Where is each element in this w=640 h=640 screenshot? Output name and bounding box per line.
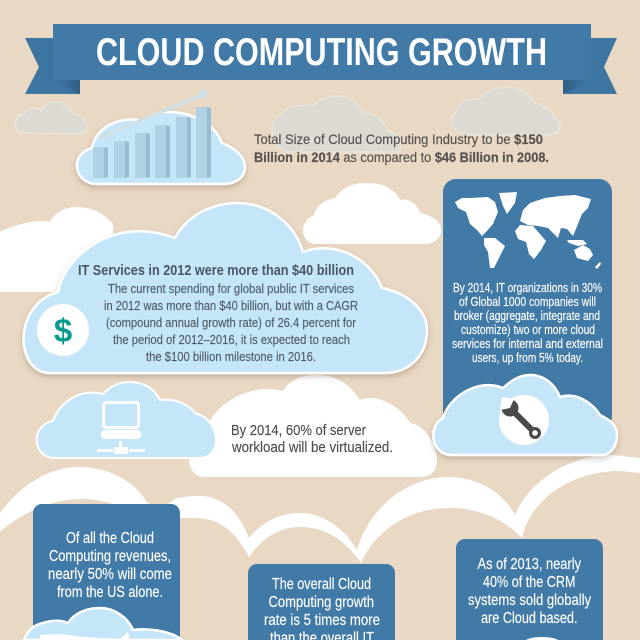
white arcs: lower cloud outline: [0, 455, 640, 640]
US map cloud: [24, 608, 182, 640]
panel text: nearly 50% will come: [48, 566, 172, 583]
icon: dollar: $: [54, 312, 72, 349]
panel text: [264, 576, 380, 640]
panel text: systems sold globally: [468, 592, 591, 609]
cloud shape: [77, 112, 245, 184]
panel text: rate is 5 times more: [264, 612, 380, 629]
background cloud: middle: [272, 96, 401, 152]
icon: dollar: [37, 304, 89, 356]
panel text: of Global 1000 companies will: [459, 295, 596, 309]
wrench cloud: [433, 375, 617, 455]
panel text: Computing revenues,: [49, 548, 171, 565]
ribbon tail left: [25, 38, 80, 94]
panel text: Of all the Cloud: [66, 530, 154, 547]
cloud top: [526, 637, 558, 640]
panel text: 40% of the CRM: [483, 574, 576, 591]
panel text: [468, 556, 591, 627]
cloud shape: [37, 382, 216, 458]
lower background cloud fill: [0, 471, 640, 640]
text: server workload: workload will be virtualized.: [231, 440, 393, 456]
text: total size of industry: Total Size of Cloud Computing Industry to be $150: [254, 131, 543, 147]
panel text: services for internal and external: [452, 337, 603, 351]
text: server workload: [231, 423, 393, 456]
icon: computer: [97, 402, 145, 454]
heading: IT Services in 2012 were more than $40 billion: [78, 263, 354, 279]
panel background: [456, 539, 603, 640]
ribbon tail right: [563, 38, 617, 94]
panel: US revenues: [24, 504, 182, 640]
panel text: users, up from 5% today.: [472, 351, 583, 365]
panel text: from the US alone.: [57, 584, 163, 601]
white cloud: upper middle: [303, 183, 441, 244]
body text: (compound annual growth rate) of 26.4 percent for: [106, 316, 356, 330]
background cloud: left: [15, 102, 87, 134]
text: total size of industry: Billion in 2014 as compared to $46 Billion in 2008.: [254, 149, 549, 165]
body text: the period of 2012–2016, it is expected to reach: [113, 333, 350, 347]
panel text: [452, 281, 603, 365]
ribbon fold left: [53, 80, 80, 94]
title ribbon: [25, 24, 617, 94]
background cloud: right: [451, 87, 560, 135]
panel text: The overall Cloud: [272, 576, 371, 593]
panel text: Computing growth: [268, 594, 374, 611]
cloud shape: [433, 375, 617, 455]
text: server workload: By 2014, 60% of server: [231, 423, 366, 439]
panel: world map and IT brokers: [443, 179, 612, 429]
text: total size of industry: [254, 131, 549, 165]
panel background: [248, 564, 395, 640]
icon: wrench: [499, 395, 549, 445]
body text: [104, 282, 358, 364]
body text: The current spending for global public IT services: [108, 282, 354, 296]
icon: US map: [40, 632, 130, 640]
arrow: growth trend: [99, 90, 209, 138]
main cloud: IT services: [24, 203, 427, 373]
ribbon band: [53, 24, 591, 80]
panel text: By 2014, IT organizations in 30%: [453, 281, 602, 295]
bar chart: [93, 107, 211, 178]
panel: growth rate: [248, 564, 395, 640]
cloud shape: [24, 203, 427, 373]
panel: CRM systems: [456, 539, 603, 640]
chart cloud: [77, 90, 245, 184]
white cloud behind virtualization text: [189, 375, 437, 477]
icon: world map: [455, 192, 601, 269]
panel text: [48, 530, 172, 601]
body text: the $100 billion milestone in 2016.: [146, 350, 316, 364]
body text: in 2012 was more than $40 billion, but with a CAGR: [104, 299, 358, 313]
computer cloud: [37, 382, 216, 458]
white cloud: behind main cloud left: [0, 207, 113, 292]
panel text: are Cloud based.: [481, 610, 578, 627]
panel text: customize) two or more cloud: [461, 323, 595, 337]
ribbon fold right: [563, 80, 591, 94]
panel background: [33, 504, 180, 640]
panel background: [443, 179, 612, 429]
panel text: broker (aggregate, integrate and: [454, 309, 600, 323]
panel text: As of 2013, nearly: [478, 556, 581, 573]
